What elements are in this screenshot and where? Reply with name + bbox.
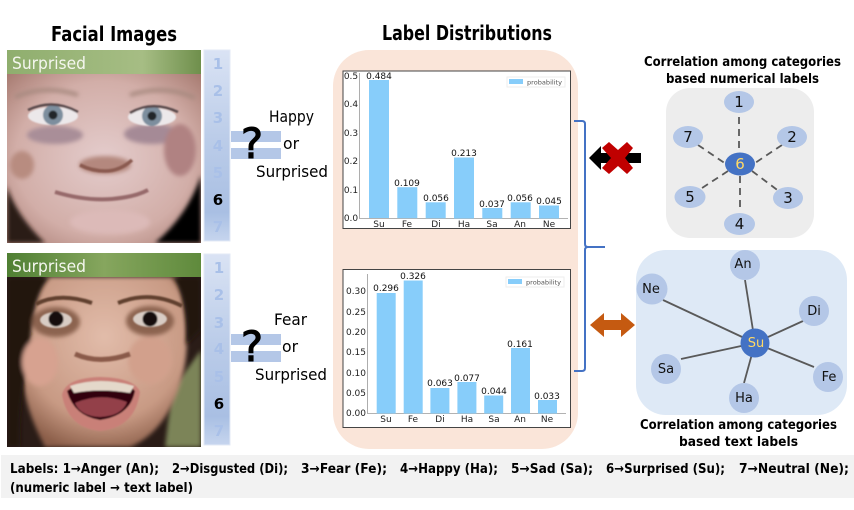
bar chart: top distribution: Su xyxy=(373,220,385,230)
label: Surprised banner text (top): Surprised xyxy=(12,54,86,74)
panel: text label correlation graph: Ha xyxy=(735,391,753,406)
bar chart: top distribution: 0.484 xyxy=(366,72,392,82)
image: screaming woman face xyxy=(7,253,201,447)
bar chart: bottom distribution: Su xyxy=(380,415,392,425)
numeric label column (bottom): 3 xyxy=(214,314,224,332)
panel: numerical label correlation graph: 4 xyxy=(735,215,744,233)
legend: numeric to text label mapping: (numeric label → text label) xyxy=(10,481,193,496)
numeric label column (top): 4 xyxy=(213,137,223,155)
bar chart: top distribution xyxy=(343,71,570,230)
text: Fear or Surprised: or xyxy=(282,337,298,356)
question mark with bars (bottom): ? xyxy=(241,322,263,371)
panel: text label correlation graph: Fe xyxy=(822,370,836,385)
heading: Label Distributions: Label Distributions xyxy=(382,21,552,45)
panel: numerical label correlation graph: 5 xyxy=(685,188,695,206)
bar chart: bottom distribution: 0.033 xyxy=(534,392,560,402)
numeric label column (top): 7 xyxy=(213,218,223,236)
legend: numeric to text label mapping: 5→Sad (Sa); xyxy=(511,462,593,477)
bar chart: top distribution: Fe xyxy=(402,220,413,230)
bar chart: bottom distribution: 0.10 xyxy=(346,369,366,379)
bar chart: top distribution: 0.213 xyxy=(451,149,477,159)
bar chart: top distribution: 0.056 xyxy=(507,194,533,204)
bar chart: bottom distribution: Ne xyxy=(541,415,554,425)
bracket connecting the two charts xyxy=(574,121,605,371)
image: surprised child face xyxy=(7,50,201,243)
bar chart: bottom distribution: 0.05 xyxy=(346,389,366,399)
legend: numeric to text label mapping xyxy=(1,455,854,498)
text: Fear or Surprised: Fear xyxy=(274,310,307,329)
bar chart: bottom distribution: 0.00 xyxy=(346,409,366,419)
heading: correlation numerical labels: based numerical labels xyxy=(666,72,819,87)
legend: numeric to text label mapping: 4→Happy (Ha); xyxy=(400,462,498,477)
bar chart: bottom distribution: An xyxy=(514,415,526,425)
bar chart: top distribution: 0.2 xyxy=(344,157,358,167)
bar chart: top distribution: 0.1 xyxy=(344,186,358,196)
bar chart: bottom distribution: 0.296 xyxy=(373,284,399,294)
panel: numerical label correlation graph xyxy=(666,88,814,238)
bar chart: top distribution: An xyxy=(514,220,526,230)
bar chart: bottom distribution: Ha xyxy=(461,415,473,425)
text: Happy or Surprised: Happy xyxy=(269,107,314,126)
heading: correlation text labels: based text labels xyxy=(679,435,798,450)
bar chart: bottom distribution: 0.15 xyxy=(346,348,366,358)
panel: numerical label correlation graph: 7 xyxy=(683,128,693,146)
bar chart: top distribution: 0.4 xyxy=(344,100,358,110)
text: Happy or Surprised: or xyxy=(283,134,299,153)
bar chart: bottom distribution: Sa xyxy=(488,415,500,425)
bar chart: bottom distribution: 0.044 xyxy=(481,387,507,397)
numeric label column (top): 6 xyxy=(213,191,223,209)
panel: numerical label correlation graph: 2 xyxy=(787,128,797,146)
legend: numeric to text label mapping: 6→Surprised (Su); xyxy=(606,462,725,477)
bar chart: top distribution: 0.109 xyxy=(394,179,420,189)
bar chart: top distribution: 0.0 xyxy=(344,214,358,224)
bar chart: bottom distribution: 0.20 xyxy=(346,328,366,338)
bar chart: bottom distribution: 0.326 xyxy=(400,272,426,282)
bar chart: top distribution: 0.3 xyxy=(344,129,358,139)
panel: text label correlation graph: Ne xyxy=(642,282,660,297)
bar chart: top distribution: Ne xyxy=(543,220,556,230)
panel: numerical label correlation graph: 1 xyxy=(734,93,744,111)
numeric label column (bottom): 1 xyxy=(214,259,224,277)
numeric label column (top): 1 xyxy=(213,55,223,73)
legend: numeric to text label mapping: 2→Disgusted (Di); xyxy=(172,462,288,477)
bar chart: top distribution: Di xyxy=(431,220,441,230)
text: Happy or Surprised: Surprised xyxy=(256,162,328,181)
numeric label column (top): 2 xyxy=(213,82,223,100)
numeric label column (top) xyxy=(204,50,230,241)
numeric label column (bottom): 6 xyxy=(214,395,224,413)
legend: numeric to text label mapping: 3→Fear (Fe); xyxy=(301,462,387,477)
numeric label column (bottom): 2 xyxy=(214,286,224,304)
question mark with bars (top): ? xyxy=(241,119,263,168)
panel: text label correlation graph: Di xyxy=(807,304,821,319)
bar chart: top distribution: 0.037 xyxy=(479,200,505,210)
panel: text label correlation graph: An xyxy=(734,257,752,272)
question mark with bars (bottom) xyxy=(231,322,281,371)
text: Fear or Surprised: Surprised xyxy=(255,365,327,384)
bar chart: bottom distribution: 0.30 xyxy=(346,287,366,297)
bar chart: bottom distribution: probability xyxy=(526,278,561,286)
legend: numeric to text label mapping: Labels: 1→Anger (An); xyxy=(10,462,159,477)
bar chart: bottom distribution: 0.161 xyxy=(507,340,533,350)
bar chart: bottom distribution: 0.077 xyxy=(454,374,480,384)
panel: text label correlation graph xyxy=(636,250,847,415)
panel: text label correlation graph: Sa xyxy=(658,362,674,377)
numeric label column (top): 3 xyxy=(213,109,223,127)
bar chart: top distribution: probability xyxy=(527,78,562,86)
bar chart: top distribution: 0.056 xyxy=(423,194,449,204)
heading: correlation text labels: Correlation among categories xyxy=(640,418,837,433)
panel: label distributions background xyxy=(333,50,578,449)
text: Fear or Surprised xyxy=(255,310,327,384)
bar chart: bottom distribution: Fe xyxy=(408,415,419,425)
label: Surprised banner text (bottom): Surprised xyxy=(12,257,86,277)
numeric label column (top): 5 xyxy=(213,164,223,182)
bar chart: bottom distribution xyxy=(343,270,570,428)
numeric label column (bottom): 5 xyxy=(214,368,224,386)
panel: numerical label correlation graph: 6 xyxy=(735,155,745,173)
bar chart: bottom distribution: 0.063 xyxy=(427,379,453,389)
bar chart: top distribution: Sa xyxy=(486,220,498,230)
numeric label column (bottom): 7 xyxy=(214,422,224,440)
bar chart: bottom distribution: Di xyxy=(435,415,445,425)
panel: numerical label correlation graph: 3 xyxy=(783,189,793,207)
icon: crossed-out black arrow xyxy=(589,142,641,174)
heading: Facial Images: Facial Images xyxy=(51,22,177,46)
question mark with bars (top) xyxy=(231,119,281,168)
bar chart: bottom distribution: 0.25 xyxy=(346,308,366,318)
panel: text label correlation graph: Su xyxy=(748,336,764,351)
text: Happy or Surprised xyxy=(256,107,328,181)
bar chart: top distribution: 0.045 xyxy=(536,197,562,207)
icon: orange double arrow xyxy=(590,313,635,337)
heading: correlation numerical labels xyxy=(644,55,841,87)
bar chart: top distribution: Ha xyxy=(458,220,470,230)
legend: numeric to text label mapping: 7→Neutral (Ne); xyxy=(739,462,849,477)
numeric label column (bottom) xyxy=(204,254,230,445)
numeric label column (bottom): 4 xyxy=(214,340,224,358)
heading: correlation text labels xyxy=(640,418,837,450)
bar chart: top distribution: 0.5 xyxy=(344,72,358,82)
